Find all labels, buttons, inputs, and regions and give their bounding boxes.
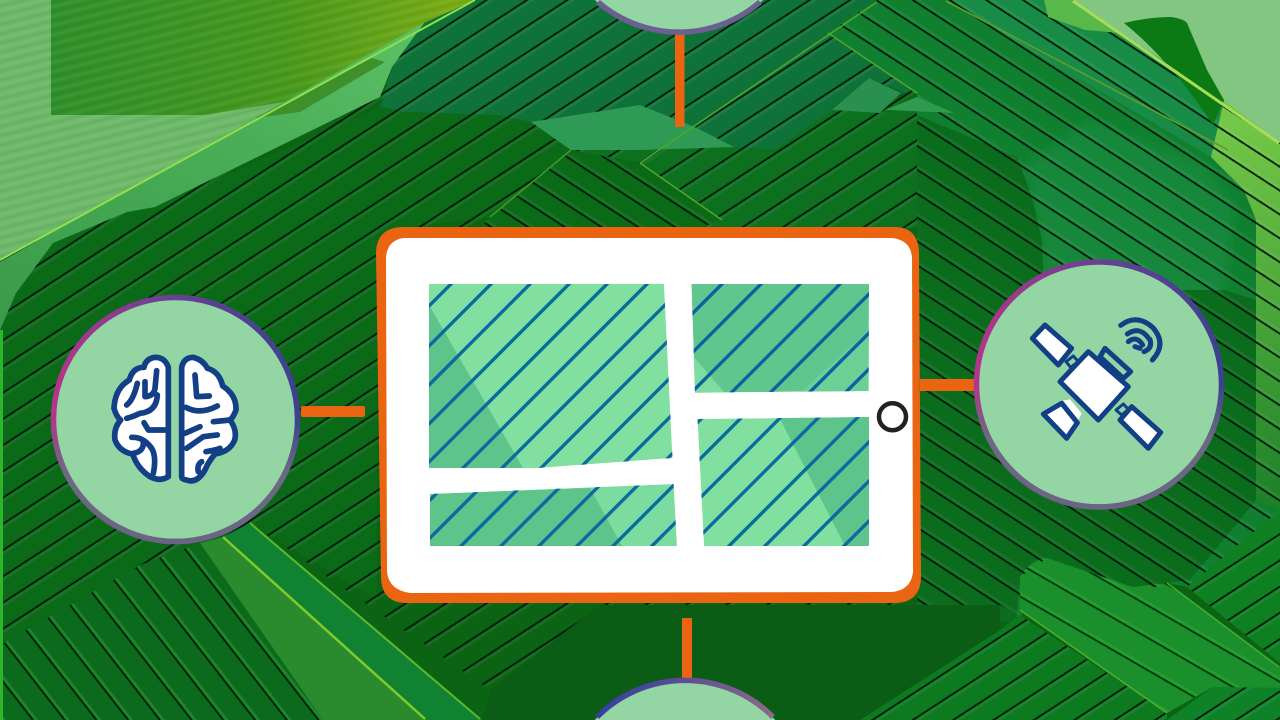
home button	[879, 403, 906, 430]
plain dark field, bottom centre	[482, 605, 1000, 720]
dark sliver under ridge	[255, 58, 385, 118]
diagonal strip, bottom left	[223, 523, 482, 720]
lower right solar panel	[1120, 407, 1161, 448]
light crop wedge, top left	[0, 0, 475, 260]
field: large plot	[429, 284, 672, 468]
dish	[1043, 403, 1077, 438]
shaded chevron field	[490, 108, 917, 228]
icon: satellite	[1032, 320, 1161, 448]
bright left edge	[0, 330, 3, 720]
teal stripe lobe, top centre	[380, 0, 917, 150]
circle: AI brain node	[54, 298, 298, 542]
right striped field	[828, 0, 1280, 623]
connector: right	[920, 379, 978, 391]
lower right block furrow lines	[1020, 566, 1280, 713]
shaded field, left	[0, 107, 571, 645]
signal arcs	[1121, 320, 1160, 360]
solar panel links	[1066, 356, 1128, 415]
light patches on lobe	[531, 0, 1120, 150]
upper left solar panel	[1032, 325, 1072, 365]
tablet screen	[386, 238, 913, 593]
field: bottom left plot	[430, 484, 677, 546]
field: bottom right plot	[698, 417, 869, 546]
circle: bottom node	[595, 680, 775, 720]
satellite body	[1060, 352, 1128, 420]
NE stripes bottom right	[1187, 510, 1280, 663]
dark shadow lobe, top right	[1124, 17, 1224, 125]
NE stripes bottom middle	[860, 615, 1167, 720]
light crop corner, top right	[1073, 0, 1280, 143]
shaded field, right of tablet	[917, 115, 1256, 623]
connector: bottom	[682, 618, 692, 684]
medium field panel above satellite	[1025, 120, 1235, 320]
small chevron field	[480, 150, 722, 228]
steep furrow lines, bottom left	[3, 547, 323, 720]
dish neck	[1063, 399, 1082, 420]
textured strip, bottom left	[200, 537, 427, 720]
tablet	[376, 227, 921, 603]
tablet frame	[376, 227, 921, 603]
NE stripes bottom corner	[1167, 687, 1280, 720]
steep stripes base, bottom left	[0, 543, 323, 720]
teal upper band, right	[946, 0, 1228, 157]
circle: satellite node	[976, 262, 1222, 507]
circle: top node	[595, 0, 763, 33]
lit stripe edge, far right	[1211, 100, 1280, 510]
side module	[1100, 348, 1131, 378]
lit rim band along ridge	[0, 23, 424, 330]
lit green block, lower right	[1020, 558, 1280, 713]
connector: left	[301, 406, 365, 417]
field: top right plot	[692, 284, 869, 393]
SE furrow lines	[484, 0, 1280, 615]
icon: brain	[114, 357, 236, 481]
connector: top	[675, 30, 684, 127]
